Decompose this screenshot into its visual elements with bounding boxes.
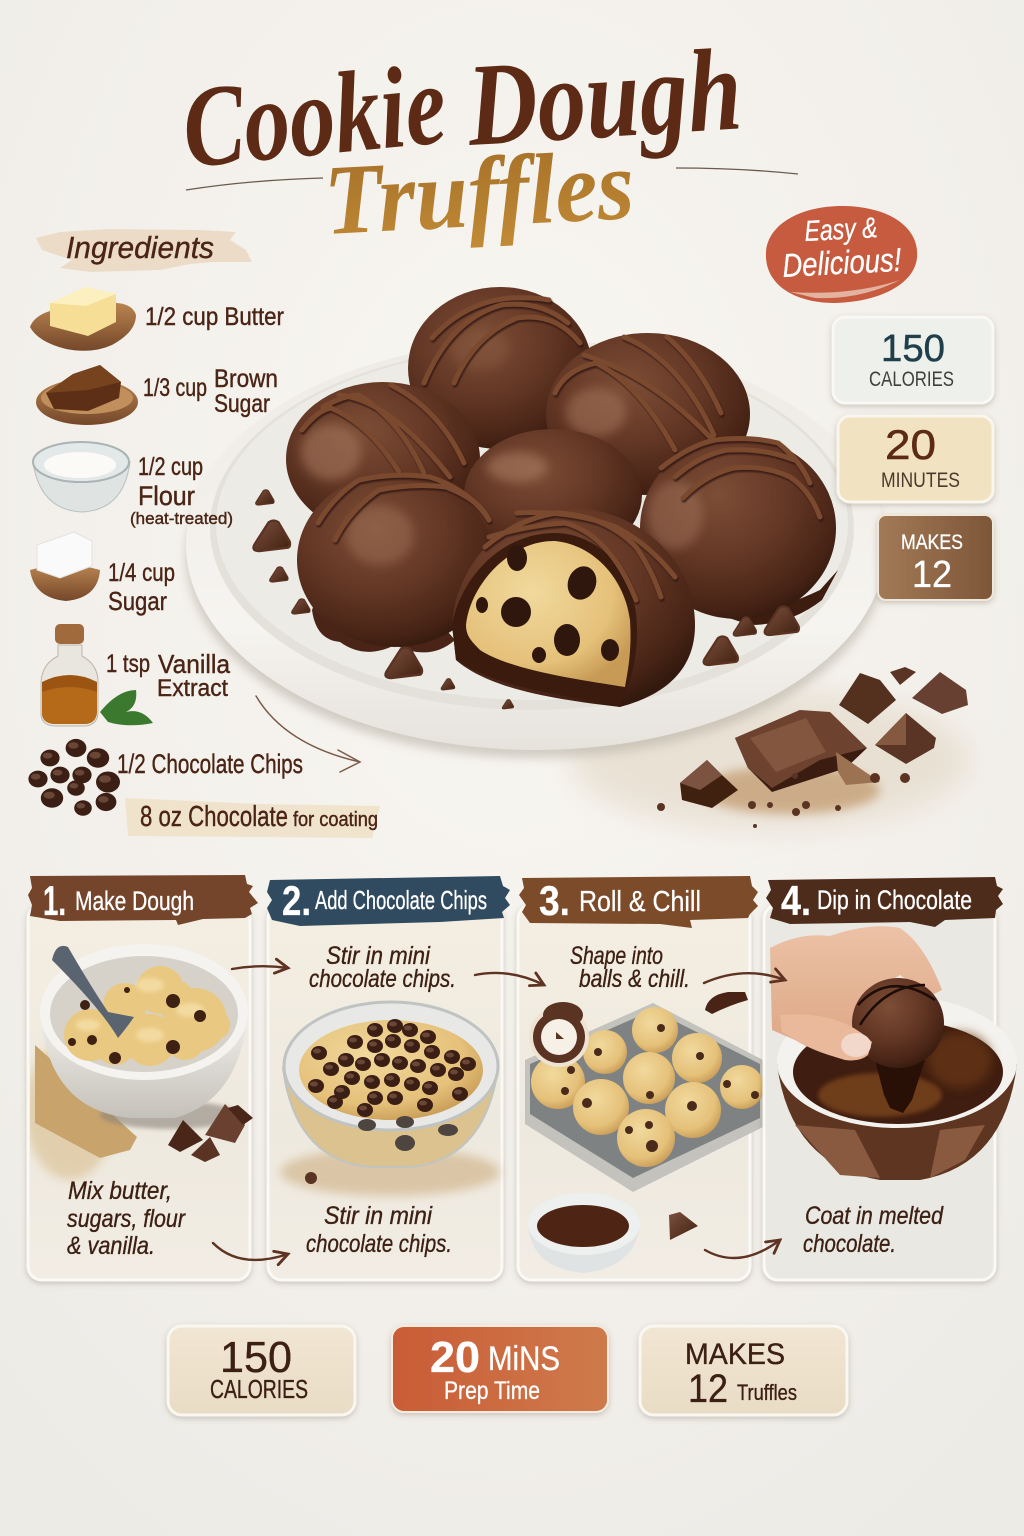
baking tray with dough balls	[525, 1003, 764, 1192]
title: Cookie Dough Truffles	[177, 23, 798, 256]
ingredient: 8 oz chocolate for coating: 8 oz Chocolate	[140, 801, 288, 833]
step 2 header: 2.	[282, 877, 311, 924]
step 4 text	[803, 1202, 944, 1258]
step 3 header: 3.	[539, 877, 570, 924]
ingredient: 8 oz chocolate for coating: for coating	[293, 809, 378, 831]
text: 1/2 cup Flour (heat-treated): (heat-treated)	[130, 509, 233, 528]
ingredient: chocolate chips	[28, 739, 303, 816]
truffle: left	[286, 382, 480, 536]
icon: butter on wooden dish	[30, 287, 136, 351]
icon: vanilla bottle with leaves	[41, 624, 153, 726]
step 1 text: Mix butter,	[68, 1177, 172, 1205]
step 1 header: Make Dough	[75, 886, 194, 916]
summary card: 150 calories: CALORIES	[210, 1374, 308, 1404]
step 1 text	[67, 1177, 186, 1260]
summary card: 20 mins prep time: MiNS	[488, 1340, 560, 1378]
step 2 bottom text	[306, 1202, 452, 1258]
step 3 top text: Shape into	[570, 942, 663, 970]
title: Cookie Dough Truffles: Cookie	[177, 40, 451, 193]
text: 1/2 cup Flour (heat-treated): Flour	[138, 481, 195, 511]
text: 1 tsp Vanilla Extract: 1 tsp	[106, 650, 150, 678]
text: 1/4 cup Sugar: 1/4 cup	[108, 559, 175, 587]
step 2 top text	[309, 942, 456, 993]
panel: step 4 dip in chocolate	[764, 877, 1017, 1280]
chocolate smear	[705, 992, 748, 1014]
small bowl of melted chocolate	[528, 1193, 640, 1273]
ingredient: sugar	[30, 532, 175, 616]
badge: Easy & Delicious	[766, 206, 917, 303]
summary card: 150 calories: 150	[220, 1333, 292, 1382]
stat card: 150 calories	[833, 317, 993, 403]
step 4 text: chocolate.	[803, 1230, 896, 1258]
arrows between steps	[213, 966, 785, 1260]
text: 1 tsp Vanilla Extract: Extract	[157, 675, 228, 702]
summary card: 150 calories	[168, 1326, 355, 1415]
truffle: right	[640, 437, 838, 625]
stat card: 20 minutes: 20	[885, 421, 936, 468]
panel: step 3 roll and chill	[518, 876, 764, 1280]
stat card: 150 calories: 150	[881, 328, 945, 370]
ingredients heading	[36, 229, 252, 272]
ingredient: 8 oz chocolate for coating	[125, 798, 380, 838]
chocolate chunks	[168, 1104, 253, 1162]
step 4 header	[766, 877, 1003, 927]
stat card: makes 12	[878, 515, 993, 600]
step 1 header: 1.	[43, 877, 66, 924]
text: 1 tsp Vanilla Extract	[106, 649, 231, 702]
icon: sugar cube in wooden bowl	[30, 532, 100, 601]
step 1 text: & vanilla.	[67, 1232, 155, 1260]
panel: step 2 add chocolate chips	[267, 876, 510, 1280]
ingredient: vanilla extract	[41, 624, 231, 726]
step 3 header: Roll & Chill	[579, 886, 701, 918]
ingredient: brown sugar	[36, 365, 278, 425]
tan shading behind bowl	[25, 1040, 115, 1180]
bowl of cookie dough with spoon	[40, 944, 248, 1129]
text: 1/4 cup Sugar	[108, 559, 175, 616]
truffle: center	[464, 429, 642, 561]
text: 1/2 cup Flour (heat-treated): 1/2 cup	[138, 453, 203, 481]
arrow: ingredients to plate	[256, 696, 360, 772]
step 3 header	[519, 876, 758, 928]
truffle: front left	[297, 473, 493, 652]
icon: chocolate chip pile	[28, 739, 120, 816]
plate	[186, 340, 886, 758]
crumb	[305, 1172, 317, 1184]
glass bowl of dough and chips	[280, 1002, 500, 1196]
summary card: 20 mins prep time: Prep Time	[444, 1377, 540, 1405]
step 2 bottom text: Stir in mini	[324, 1202, 433, 1230]
ingredients heading: Ingredients	[66, 230, 214, 265]
text: 1 tsp Vanilla Extract: Vanilla	[158, 649, 231, 679]
step 4 header: 4.	[781, 877, 811, 924]
stat card: 20 minutes: MINUTES	[881, 469, 960, 492]
step 2 header	[267, 876, 510, 926]
text: 1/2 cup Butter: 1/2 cup Butter	[145, 303, 284, 331]
step 2 header: Add Chocolate Chips	[315, 885, 487, 915]
step 2 top text: chocolate chips.	[309, 965, 456, 993]
plate with truffles	[186, 287, 886, 758]
summary card: 20 mins prep time	[392, 1326, 608, 1412]
ingredient: butter	[30, 287, 284, 351]
truffle: cut open showing dough	[452, 507, 695, 707]
step 1 text: sugars, flour	[67, 1205, 186, 1233]
text: 1/3 cup Brown Sugar: Brown	[214, 365, 278, 393]
badge: Easy & Delicious: Easy &	[804, 212, 878, 248]
step 4 text: Coat in melted	[805, 1202, 944, 1230]
panel: step 1 make dough	[25, 875, 258, 1280]
summary card: makes 12 truffles	[640, 1326, 847, 1415]
text: 1/3 cup Brown Sugar	[143, 365, 278, 418]
step 2 top text: Stir in mini	[326, 942, 431, 970]
title: Cookie Dough Truffles: Dough	[463, 23, 745, 171]
text: 1/3 cup Brown Sugar: Sugar	[214, 390, 270, 418]
icon: brown sugar dish	[36, 365, 138, 425]
step 3 top text: balls & chill.	[579, 965, 690, 993]
summary card: 20 mins prep time: 20	[430, 1333, 480, 1382]
icon: glass bowl of flour	[33, 442, 130, 512]
bowl of melted chocolate	[777, 996, 1017, 1180]
badge: Easy & Delicious: Delicious!	[781, 241, 902, 284]
step 1 header	[28, 875, 258, 925]
truffle: back top	[408, 287, 592, 449]
stat card: 20 minutes	[838, 416, 993, 502]
truffle: back right	[546, 333, 750, 495]
title: Cookie Dough Truffles: Truffles	[321, 129, 637, 256]
chocolate chunk	[669, 1212, 698, 1240]
summary card: makes 12 truffles: Truffles	[737, 1380, 797, 1405]
icon: clock	[529, 1002, 589, 1067]
loose chocolate chunks and dust	[657, 667, 968, 828]
step 3 top text	[570, 942, 690, 993]
dust shading behind plate	[570, 690, 970, 830]
text: 1/2 Chocolate Chips: 1/2 Chocolate Chips	[117, 749, 303, 779]
stat card: makes 12: MAKES	[901, 531, 963, 554]
text: 1/4 cup Sugar: Sugar	[108, 586, 167, 616]
stat card: 150 calories: CALORIES	[869, 368, 954, 391]
step 4 header: Dip in Chocolate	[817, 885, 972, 915]
step 2 bottom text: chocolate chips.	[306, 1230, 452, 1258]
plate chocolate chunks	[253, 490, 799, 709]
stat card: makes 12: 12	[912, 554, 952, 596]
text: 1/3 cup Brown Sugar: 1/3 cup	[143, 374, 207, 402]
summary card: makes 12 truffles: MAKES	[685, 1338, 785, 1371]
hand holding truffle	[770, 926, 944, 1068]
text: 1/2 cup Flour (heat-treated)	[130, 453, 233, 528]
ingredient: flour	[33, 442, 233, 528]
summary card: makes 12 truffles: 12	[688, 1367, 728, 1411]
cutting board	[35, 1045, 137, 1158]
